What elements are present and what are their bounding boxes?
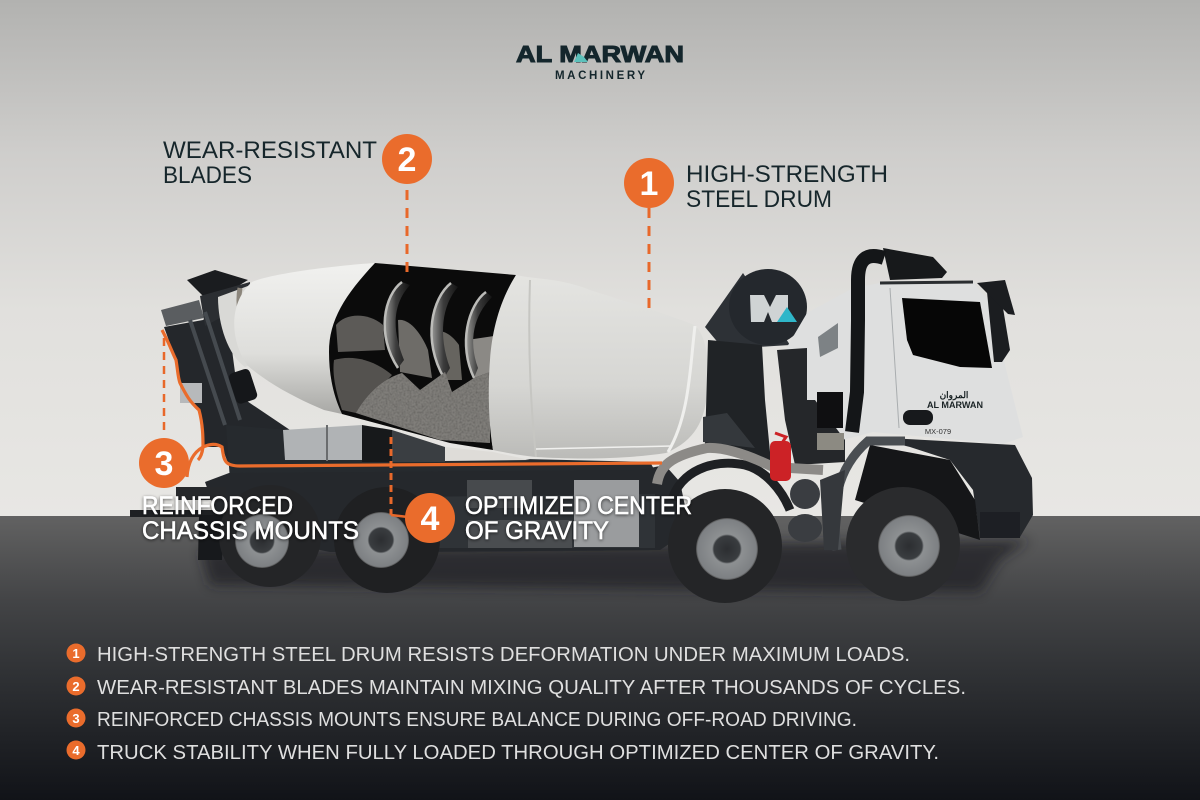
label 1: STEEL DRUM [686, 186, 832, 213]
callout 2 [163, 134, 432, 274]
leader line 3 [163, 338, 165, 436]
drum: cut-away interior [329, 263, 516, 450]
label 4: OPTIMIZED CENTER [465, 492, 692, 520]
bumper and arches [835, 437, 1033, 550]
mirror [987, 290, 1010, 362]
badge 1: 1 [640, 165, 658, 203]
mixer head with logo [703, 269, 807, 466]
concrete mounds [333, 316, 494, 413]
item 3: REINFORCED CHASSIS MOUNTS ENSURE BALANCE DURING OFF-ROAD DRIVING. [97, 709, 857, 731]
item 2: WEAR-RESISTANT BLADES MAINTAIN MIXING QUALITY AFTER THOUSANDS OF CYCLES. [97, 677, 966, 699]
item 4: TRUCK STABILITY WHEN FULLY LOADED THROUGH OPTIMIZED CENTER OF GRAVITY. [97, 742, 939, 764]
label 1: HIGH-STRENGTH [686, 161, 888, 188]
badge 3: 3 [155, 445, 173, 483]
truck shadow [200, 540, 1030, 592]
wheel rear 1 [219, 485, 321, 587]
item 1: HIGH-STRENGTH STEEL DRUM RESISTS DEFORMATION UNDER MAXIMUM LOADS. [97, 644, 910, 666]
logo [516, 41, 684, 82]
drum: rear section [234, 263, 375, 414]
wheel 4 [846, 487, 960, 601]
badge 2: 2 [398, 141, 416, 179]
badge 3 [139, 438, 189, 488]
drum: front section [489, 275, 708, 458]
window [902, 298, 992, 368]
snorkel pipe [852, 256, 884, 432]
door branding: MX-079 [925, 427, 951, 436]
background wall [0, 0, 1200, 518]
label 2: BLADES [163, 162, 252, 189]
callout 3 [139, 338, 359, 545]
mixer truck [130, 248, 1033, 603]
item 4: 4 [72, 743, 80, 758]
door branding [925, 390, 983, 436]
label 3: REINFORCED [142, 492, 293, 520]
ground [0, 516, 1200, 800]
label 2: WEAR-RESISTANT [163, 137, 377, 164]
leader line 1 [648, 208, 650, 312]
logo: AL MARWAN [516, 41, 684, 67]
callout 1 [624, 158, 888, 312]
door branding: AL MARWAN [927, 400, 983, 410]
drum roller neck [218, 283, 262, 367]
rear frame and hopper [161, 270, 290, 466]
item 2: 2 [72, 679, 80, 694]
exhaust and extinguisher [657, 433, 845, 550]
mixing blades [385, 282, 492, 378]
wheel 3 [668, 489, 782, 603]
badge 4 [405, 493, 455, 543]
item 3: 3 [72, 711, 80, 726]
roof visor [883, 248, 947, 280]
callout 4 leader [391, 437, 408, 517]
frame and tank below drum [226, 425, 660, 480]
label 4: OF GRAVITY [465, 517, 609, 545]
door branding: المروان [940, 390, 968, 401]
benefits list [66, 644, 966, 764]
badge 1 [624, 158, 674, 208]
logo: MACHINERY [555, 70, 645, 82]
callout 4 [405, 492, 692, 545]
item 1: 1 [72, 646, 80, 661]
label 3: CHASSIS MOUNTS [142, 517, 359, 545]
chassis rail [205, 465, 690, 552]
badge 4: 4 [421, 500, 440, 538]
engine bay detail [777, 348, 845, 465]
concrete front [356, 372, 490, 443]
leader line 2 [406, 190, 408, 274]
highlight: chassis mount outline [162, 330, 662, 477]
cab [777, 248, 1023, 465]
wheel rear 2 [334, 487, 440, 593]
badge 2 [382, 134, 432, 184]
